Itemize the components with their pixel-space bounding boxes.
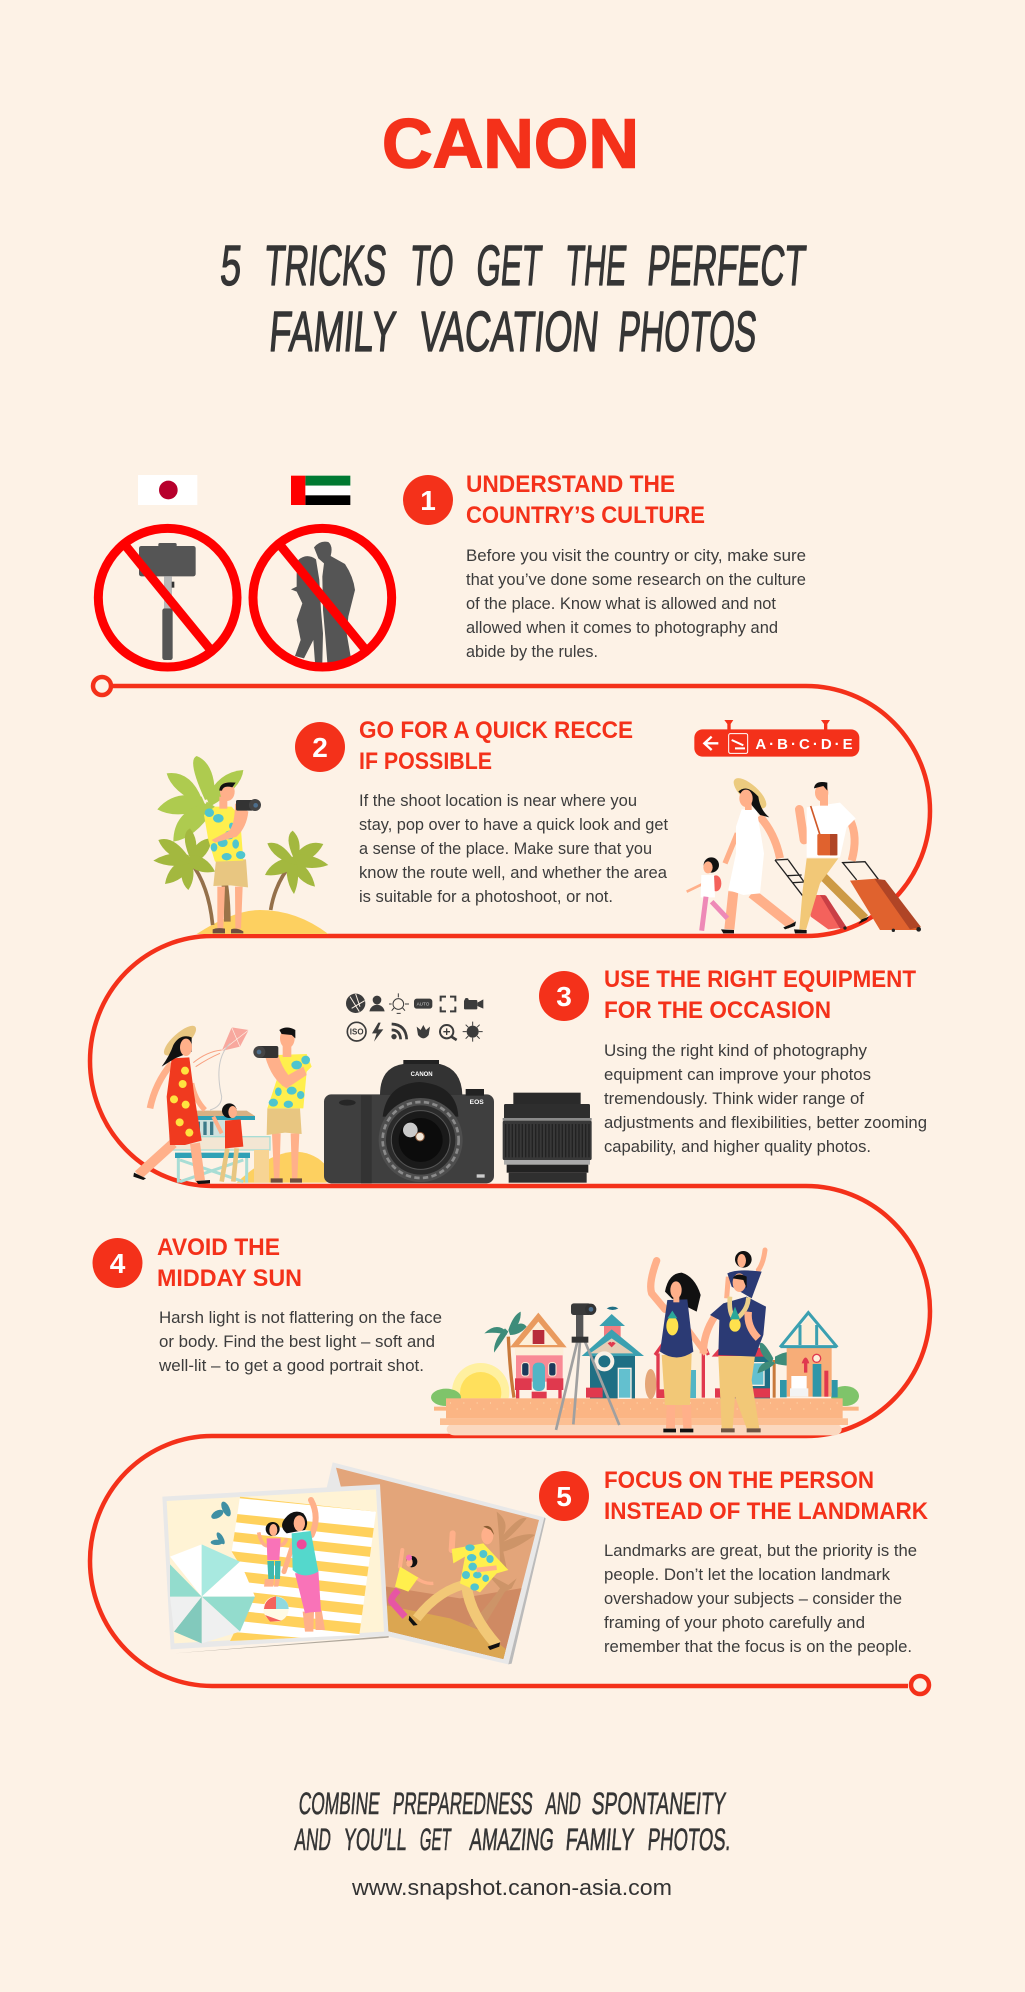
text block: step 1 — [466, 546, 806, 661]
red-framed house — [655, 1343, 708, 1398]
heading: step 5: FOCUS ON THE PERSON — [604, 1467, 874, 1494]
text block: step 1: Before you visit the country or city, make sure — [466, 546, 806, 565]
title: 5 — [218, 234, 244, 298]
title: VACATION — [417, 300, 601, 364]
beach umbrella — [170, 1544, 255, 1643]
closing tagline: AND — [544, 1786, 582, 1821]
text block: step 2: stay, pop over to have a quick look and get — [359, 815, 668, 834]
illustration: photographer with palm trees — [153, 756, 328, 934]
woman — [311, 1500, 316, 1535]
text block: step 4: or body. Find the best light – soft and — [159, 1332, 435, 1351]
DSLR camera — [324, 1060, 494, 1183]
man with bag — [794, 782, 869, 933]
number badge 3 — [539, 971, 589, 1021]
sand dune — [237, 1152, 327, 1183]
heading: step 4: AVOID THE — [157, 1234, 280, 1261]
text block: step 1: abide by the rules. — [466, 642, 598, 661]
closing tagline: AND — [293, 1822, 332, 1857]
heading: step 1: UNDERSTAND THE — [466, 471, 675, 498]
heading: step 4 — [157, 1234, 302, 1292]
DSLR camera: CANON — [411, 1072, 433, 1078]
number badge 2 — [295, 722, 345, 772]
girl — [259, 1532, 287, 1546]
closing tagline: FAMILY — [564, 1822, 636, 1857]
lifeguard hut — [169, 1111, 270, 1183]
sand dune — [197, 910, 328, 934]
surfboard — [645, 1369, 656, 1399]
closing tagline: AMAZING — [468, 1822, 555, 1857]
number badge 5: 5 — [556, 1481, 572, 1512]
teal house — [582, 1307, 644, 1398]
text block: step 5: remember that the focus is on the people. — [604, 1637, 912, 1656]
number badge 1 — [403, 475, 453, 525]
text block: step 4: Harsh light is not flattering on the face — [159, 1308, 442, 1327]
DSLR camera: EOS — [470, 1099, 484, 1106]
illustration: no-selfie and no-kissing signs with flags — [98, 475, 392, 667]
text block: step 3: Using the right kind of photography — [604, 1041, 867, 1060]
flip-flops and beach ball — [210, 1500, 233, 1545]
child — [687, 857, 727, 931]
text block: step 1: that you’ve done some research on the culture — [466, 570, 806, 589]
heading: step 2 — [359, 717, 633, 775]
text block: step 2: a sense of the place. Make sure that you — [359, 839, 652, 858]
text block: step 2: If the shoot location is near where you — [359, 791, 637, 810]
illustration: beach houses, tripod and family — [431, 1250, 859, 1435]
text block: step 3: equipment can improve your photos — [604, 1065, 871, 1084]
text block: step 5: framing of your photo carefully and — [604, 1613, 865, 1632]
heading: step 2: IF POSSIBLE — [359, 748, 492, 775]
man with camera — [204, 782, 261, 933]
title: TRICKS — [262, 234, 389, 298]
heading: step 5 — [604, 1467, 929, 1525]
closing tagline: PHOTOS. — [646, 1822, 732, 1857]
text block: step 4 — [158, 1308, 442, 1375]
heading: step 2: GO FOR A QUICK RECCE — [359, 717, 633, 744]
closing tagline: COMBINE — [297, 1786, 381, 1821]
airport gate sign: A·B·C·D·E — [755, 736, 853, 753]
icon: selfie stick — [139, 543, 196, 660]
waving woman — [651, 1261, 706, 1432]
closing tagline: YOU'LL — [342, 1822, 408, 1857]
back photo: father and child dancing — [327, 1462, 546, 1664]
sun — [452, 1363, 510, 1398]
number badge 4 — [92, 1238, 142, 1288]
heading: step 1 — [466, 471, 705, 529]
bushes — [431, 1386, 859, 1406]
heading: step 4: MIDDAY SUN — [157, 1265, 302, 1292]
text block: step 1: of the place. Know what is allowed and not — [466, 594, 776, 613]
illustration: family with kite, camera and lens — [133, 993, 592, 1184]
dark blue house with palm — [712, 1343, 798, 1398]
text block: step 3 — [604, 1041, 927, 1156]
palm trees — [153, 756, 328, 925]
title: THE — [563, 234, 629, 298]
platform — [434, 1398, 859, 1435]
text block: step 3: tremendously. Think wider range of — [604, 1089, 864, 1108]
camera on tripod — [556, 1303, 619, 1430]
text block: step 1: allowed when it comes to photography and — [466, 618, 778, 637]
settings icons: AUTO — [417, 1001, 430, 1006]
text block: step 5: Landmarks are great, but the priority is the — [604, 1541, 917, 1560]
title: TO — [408, 234, 456, 298]
suitcases — [775, 859, 921, 932]
text block: step 2: is suitable for a photoshoot, or not. — [359, 887, 613, 906]
text block: step 2 — [359, 791, 668, 906]
camera lens — [503, 1093, 592, 1183]
settings icons — [346, 993, 483, 1042]
number badge 4: 4 — [110, 1248, 126, 1279]
woman in white dress — [721, 773, 796, 933]
title — [218, 234, 808, 364]
icon: Japan flag — [138, 475, 197, 505]
heading: step 1: COUNTRY’S CULTURE — [466, 502, 705, 529]
front photo: mother and daughter on towel — [162, 1484, 389, 1655]
man with camera — [253, 1027, 312, 1183]
website URL: www.snapshot.canon-asia.com — [351, 1875, 672, 1900]
title: FAMILY — [267, 300, 398, 364]
closing tagline: GET — [418, 1822, 453, 1857]
closing tagline: PREPAREDNESS — [391, 1786, 534, 1821]
number badge 1: 1 — [420, 485, 436, 516]
icon: prohibition sign one — [98, 528, 237, 667]
icon: couple silhouette — [291, 542, 355, 663]
number badge 3: 3 — [556, 981, 572, 1012]
heading: step 5: INSTEAD OF THE LANDMARK — [604, 1498, 929, 1525]
illustration: airport sign and travelling family — [687, 720, 921, 933]
text block: step 3: adjustments and flexibilities, better zooming — [604, 1113, 927, 1132]
settings icons: ISO — [350, 1028, 364, 1037]
orange house — [780, 1313, 838, 1397]
man carrying child — [703, 1250, 766, 1432]
closing tagline — [293, 1786, 732, 1857]
icon: prohibition sign two — [253, 528, 392, 667]
closing tagline: SPONTANEITY — [590, 1786, 728, 1821]
title: PERFECT — [645, 234, 808, 298]
illustration: two vacation photographs — [162, 1455, 550, 1672]
number badge 5 — [539, 1471, 589, 1521]
number badge 2: 2 — [312, 732, 328, 763]
heading: step 3 — [604, 966, 916, 1024]
heading: step 3: USE THE RIGHT EQUIPMENT — [604, 966, 916, 993]
pink house with palm — [484, 1312, 567, 1398]
child in red — [213, 1103, 243, 1182]
text block: step 5: overshadow your subjects – consider the — [604, 1589, 902, 1608]
text block: step 2: know the route well, and whether the area — [359, 863, 668, 882]
heading: step 3: FOR THE OCCASION — [604, 997, 831, 1024]
title: PHOTOS — [616, 300, 759, 364]
icon: UAE flag — [291, 476, 350, 505]
text block: step 5: people. Don’t let the location landmark — [604, 1565, 890, 1584]
text block: step 4: well-lit – to get a good portrait shot. — [158, 1356, 424, 1375]
text block: step 5 — [604, 1541, 917, 1656]
woman in red dress — [133, 1021, 210, 1184]
kite — [193, 1027, 249, 1110]
airport gate sign — [694, 720, 859, 757]
text block: step 3: capability, and higher quality photos. — [604, 1137, 871, 1156]
route line — [90, 677, 930, 1694]
title: GET — [474, 234, 544, 298]
logo: CANON: CANON — [382, 104, 639, 182]
